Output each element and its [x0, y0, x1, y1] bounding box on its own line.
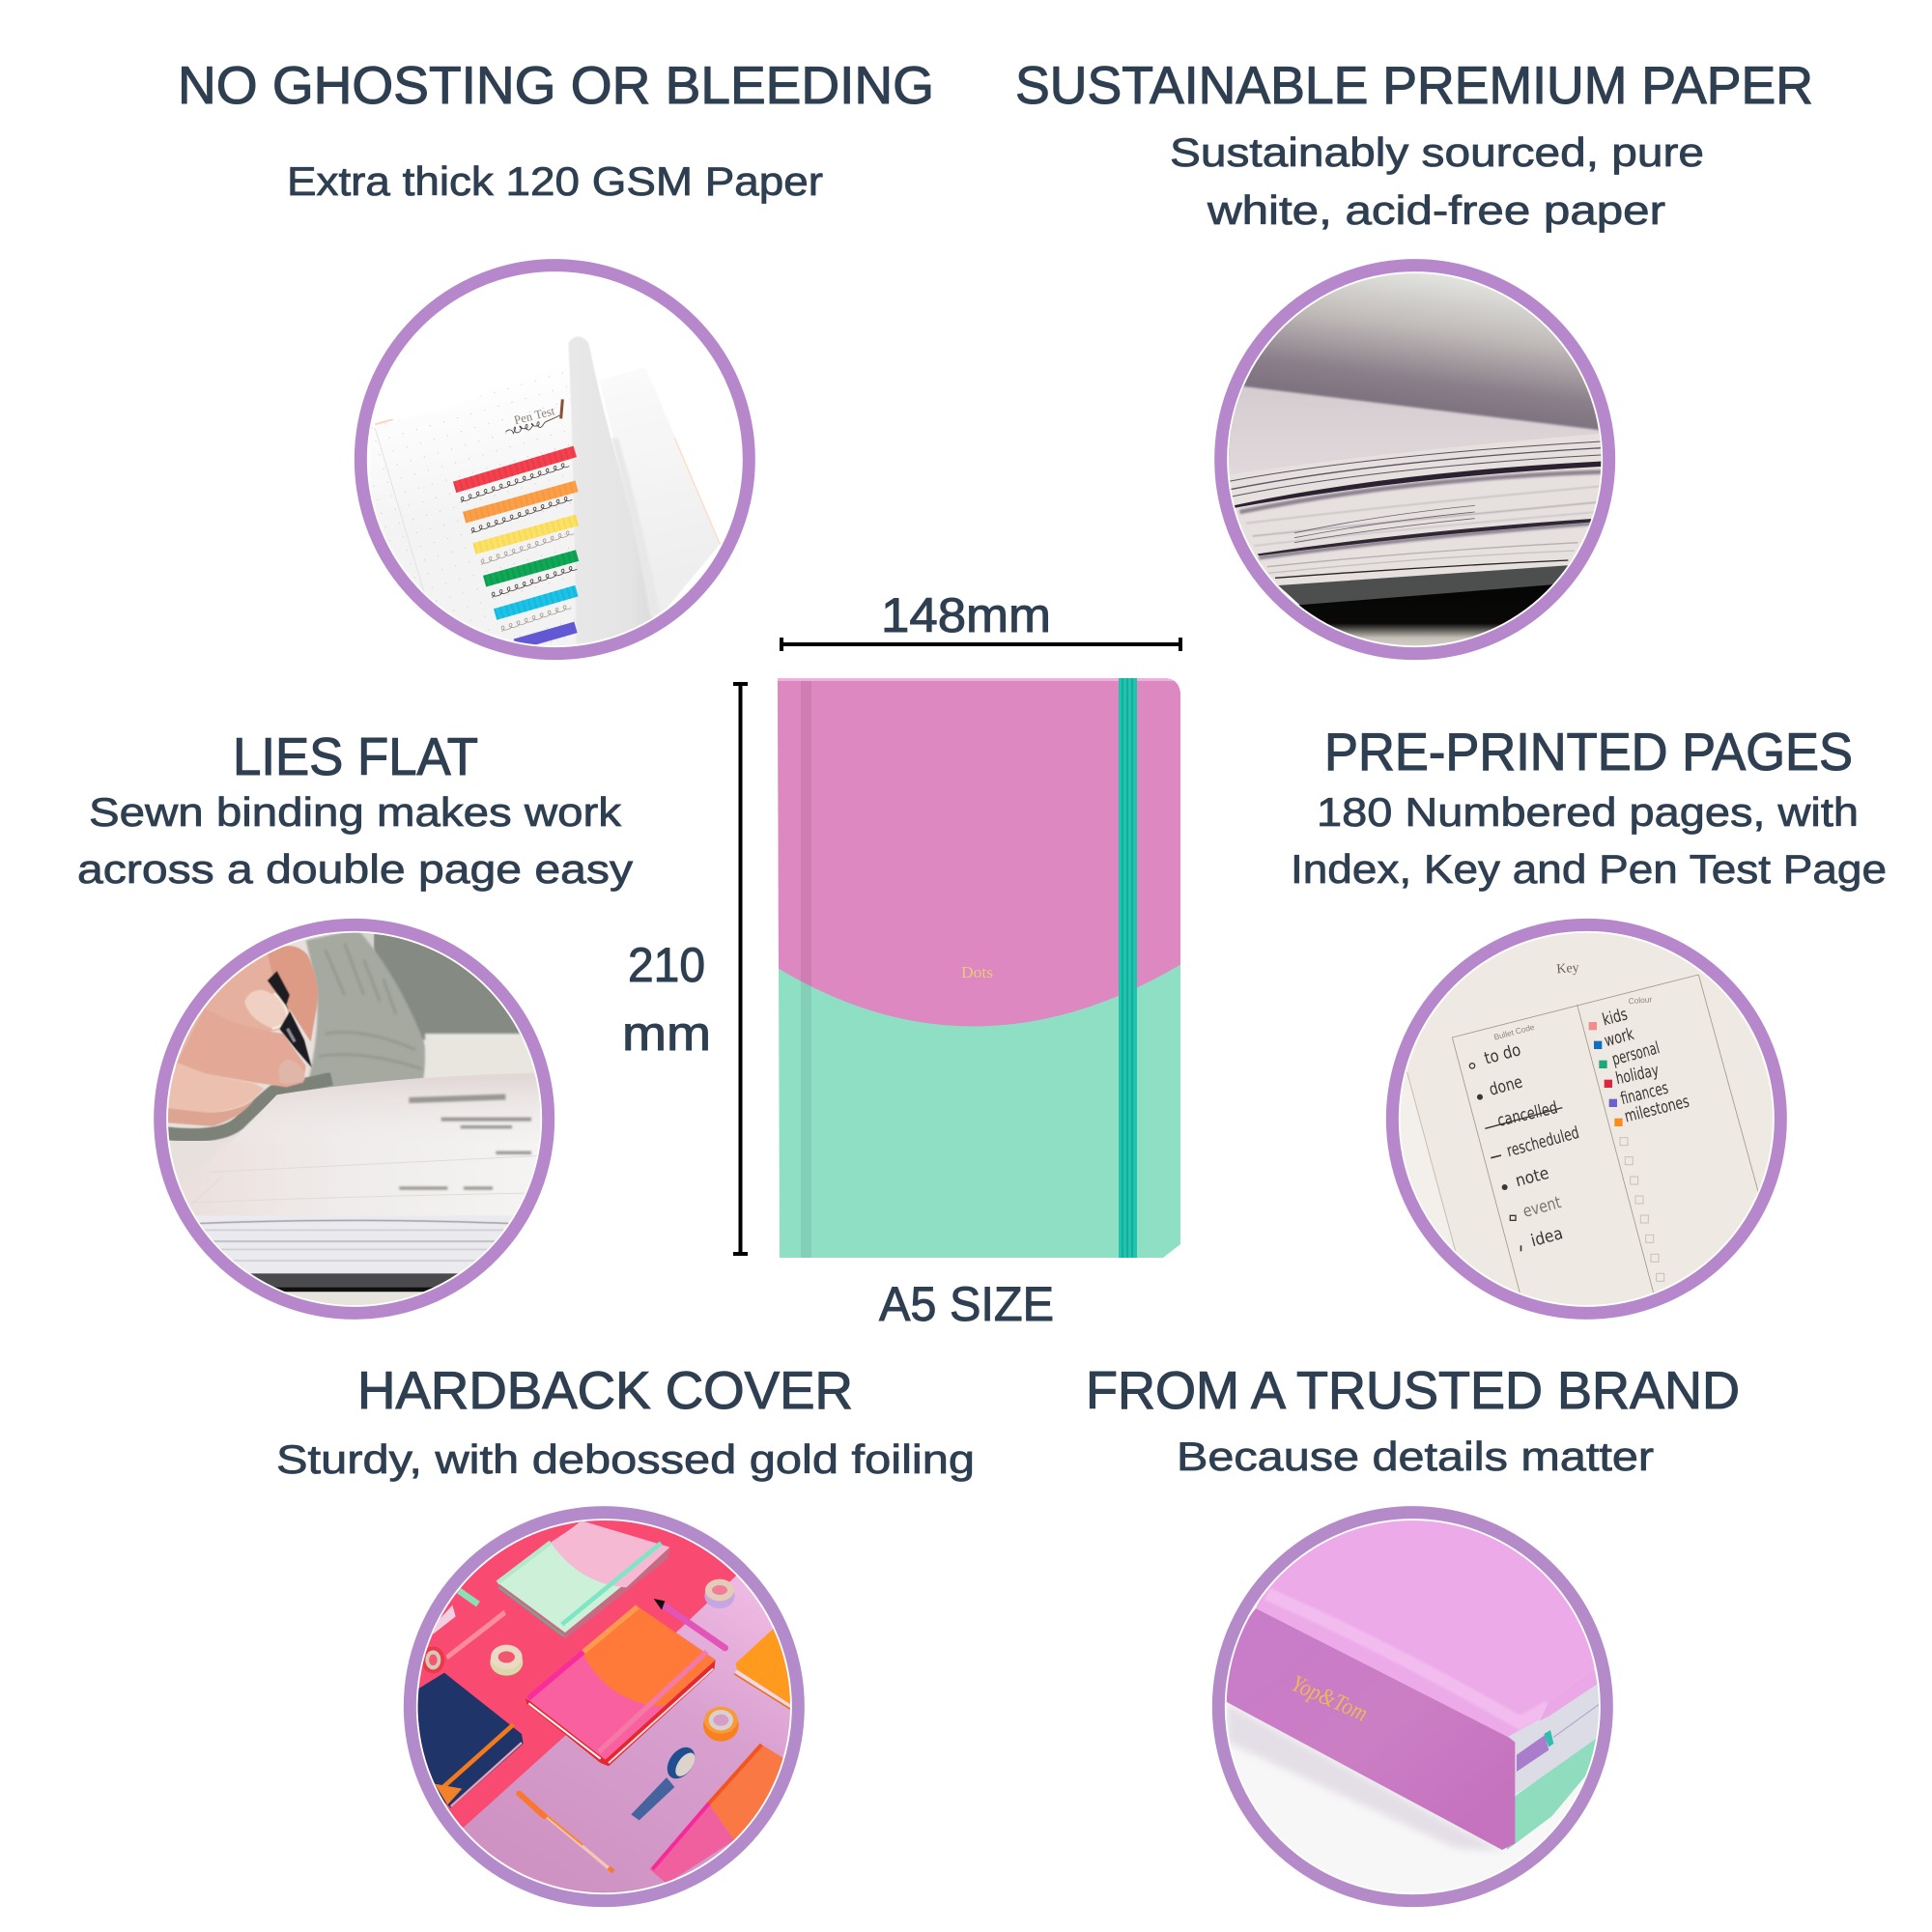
handwritten bullet list: done: [1487, 1072, 1524, 1100]
text: paper weight: Extra thick 120 GSM Paper: [287, 158, 823, 204]
text: pages description: 180 Numbered pages, with: [1317, 789, 1859, 835]
text: pages description: [1291, 789, 1887, 892]
colour key: holiday: [1614, 1061, 1661, 1089]
dimension label: height: mm: [622, 1007, 711, 1061]
handwritten bullet list: event: [1520, 1193, 1563, 1222]
dimension label: height: [622, 938, 711, 1061]
feature: pre-printed pages: [1291, 722, 1887, 1321]
feature: hardback cover: [276, 1360, 975, 1906]
text: binding description: across a double page easy: [77, 846, 633, 892]
notebook cover: [773, 674, 1188, 1264]
arrow: width dimension line: [781, 638, 1180, 651]
photo circle: hand writing in open notebook: [157, 924, 551, 1321]
bottom right notebook: [708, 1744, 789, 1840]
feature: trusted brand: [1086, 1360, 1740, 1906]
centre notebook: [526, 1605, 716, 1766]
handwritten bullet list: [1469, 1040, 1581, 1251]
hand: [164, 946, 318, 1126]
text: pages description: Index, Key and Pen Test Page: [1291, 846, 1887, 892]
feature: sustainable premium paper: [1015, 55, 1813, 654]
handwritten bullet list: note: [1514, 1164, 1551, 1191]
washi tapes: [421, 1579, 739, 1820]
photo circle: colourful notebooks flat lay: [406, 1513, 805, 1906]
photo circle: paper edge close-up: [1217, 264, 1616, 654]
text: cover description: Sturdy, with debossed gold foiling: [276, 1436, 975, 1482]
colour key: kids: [1601, 1005, 1630, 1030]
text: brand description: Because details matter: [1177, 1434, 1654, 1479]
rainbow swatches: [455, 415, 578, 644]
text: paper description: Sustainably sourced, pure: [1170, 129, 1704, 175]
handwritten bullet list: rescheduled: [1505, 1123, 1581, 1161]
arrow: height dimension line: [733, 684, 748, 1254]
pens: [664, 1605, 725, 1648]
dimension label: width: 148mm: [881, 588, 1051, 642]
photo circle: pen test page: Pen Test: [513, 404, 556, 427]
heading: sustainable premium paper: SUSTAINABLE PREMIUM PAPER: [1015, 55, 1813, 115]
photo circle: pen test page: [355, 258, 760, 664]
centre notebook with dimensions: [622, 588, 1188, 1331]
orange notebook right: [736, 1629, 790, 1708]
text: paper description: [1170, 129, 1704, 233]
photo circle: key page: Bullet Code: [1492, 1022, 1536, 1042]
heading: pre-printed pages: PRE-PRINTED PAGES: [1324, 722, 1853, 781]
green notebook: [497, 1548, 670, 1638]
foil label on cover: Dots: [961, 963, 993, 981]
open page: [252, 1078, 540, 1215]
feature: lies flat: [77, 726, 633, 1321]
handwritten bullet list: cancelled: [1495, 1098, 1559, 1131]
heading: hardback cover: HARDBACK COVER: [357, 1360, 853, 1420]
text: paper description: white, acid-free paper: [1207, 187, 1665, 233]
handwritten bullet list: idea: [1529, 1224, 1565, 1251]
text: binding description: [77, 789, 633, 892]
size label: A5 SIZE: [879, 1277, 1054, 1331]
colour key: [1589, 1005, 1691, 1281]
sweater ribs: [319, 944, 422, 1069]
heading: from a trusted brand: FROM A TRUSTED BRAND: [1086, 1360, 1740, 1420]
colour key: finances: [1619, 1079, 1670, 1109]
photo circle: key page: [1391, 924, 1784, 1321]
heading: no ghosting or bleeding: NO GHOSTING OR BLEEDING: [178, 55, 934, 115]
text: binding description: Sewn binding makes work: [89, 789, 622, 835]
photo circle: notebook spine with gold logo: [1217, 1510, 1616, 1906]
photo circle: key page: Key: [1556, 961, 1579, 977]
colour key: work: [1603, 1025, 1636, 1051]
photo circle: notebook spine with gold logo: Yop&Tom: [1288, 1670, 1372, 1727]
colour key: personal: [1610, 1038, 1662, 1069]
handwritten bullet list: to do: [1482, 1040, 1523, 1068]
navy notebook: [415, 1673, 524, 1808]
photo circle: key page: Colour: [1628, 994, 1653, 1006]
sweater cuff: [166, 1079, 331, 1135]
dimension label: height: 210: [628, 938, 705, 992]
colour key: milestones: [1623, 1093, 1691, 1127]
heading: lies flat: LIES FLAT: [233, 726, 478, 786]
feature: no ghosting or bleeding: [178, 55, 934, 664]
